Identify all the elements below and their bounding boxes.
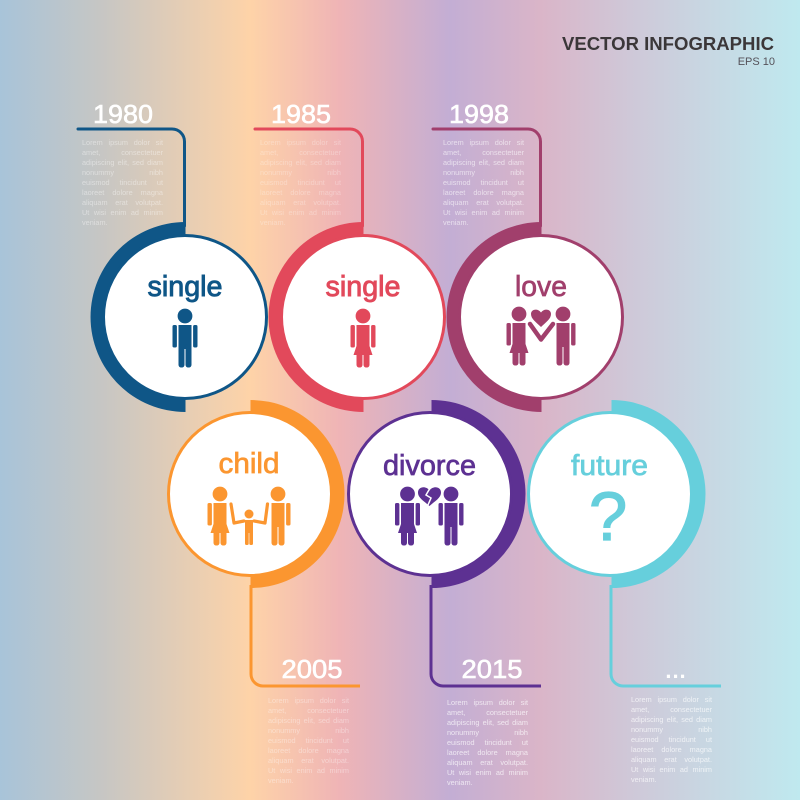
text block: 1998: aliquam erat volutpat. <box>443 198 524 207</box>
text block: 2005: Ut wisi enim ad minim <box>268 766 349 775</box>
text block: future: adipiscing elit, sed diam <box>631 715 712 724</box>
text block: 2005: veniam. <box>268 776 294 784</box>
text block: 1985: euismod tincidunt ut <box>260 178 341 187</box>
text block: 1998: Ut wisi enim ad minim <box>443 208 524 217</box>
text block: 2015: adipiscing elit, sed diam <box>447 718 528 727</box>
node: 1980 single: 1980 <box>93 99 153 129</box>
text block: 1980: laoreet dolore magna <box>82 188 163 197</box>
text block: 2005: euismod tincidunt ut <box>268 736 349 745</box>
node: 2015 divorce <box>348 400 541 686</box>
node: 2005 child: child <box>218 448 280 480</box>
text block: 2015: nonummy nibh <box>447 728 528 737</box>
text block: 1985: nonummy nibh <box>260 168 341 177</box>
text block: 1998: nonummy nibh <box>443 168 524 177</box>
icon: family with child <box>208 487 290 546</box>
text block: 2005: adipiscing elit, sed diam <box>268 716 349 725</box>
text block: future: laoreet dolore magna <box>631 745 712 754</box>
node: 2005 child <box>168 400 360 686</box>
text block: 2005: amet, consectetuer <box>268 706 349 715</box>
text block: 2005: nonummy nibh <box>268 726 349 735</box>
node: future <box>528 400 721 686</box>
text block: future <box>631 695 712 784</box>
text block: future: Lorem ipsum dolor sit <box>631 695 712 704</box>
text block: 1985: amet, consectetuer <box>260 148 341 157</box>
node: 2005 child: 2005 <box>282 654 342 684</box>
node: 1998 love: love <box>515 271 567 303</box>
text block: 1980: euismod tincidunt ut <box>82 178 163 187</box>
text block: 2015: Ut wisi enim ad minim <box>447 768 528 777</box>
node: 1985 single: 1985 <box>271 99 331 129</box>
text block: 1998: euismod tincidunt ut <box>443 178 524 187</box>
text block: 1980: Ut wisi enim ad minim <box>82 208 163 217</box>
text block: 1985: adipiscing elit, sed diam <box>260 158 341 167</box>
text block: 1985: aliquam erat volutpat. <box>260 198 341 207</box>
text block: 2015: veniam. <box>447 778 473 786</box>
text block: 1980: adipiscing elit, sed diam <box>82 158 163 167</box>
node: 2015 divorce: 2015 <box>462 654 522 684</box>
text block: 2015: Lorem ipsum dolor sit <box>447 698 528 707</box>
node: 1985 single: single <box>326 271 400 303</box>
text block: 2015: euismod tincidunt ut <box>447 738 528 747</box>
text block: 2015: laoreet dolore magna <box>447 748 528 757</box>
node: future: ... <box>665 658 687 683</box>
text block: 2015: amet, consectetuer <box>447 708 528 717</box>
icon: question mark: ? <box>589 478 627 555</box>
text block: 2015: aliquam erat volutpat. <box>447 758 528 767</box>
text block: 1985: Lorem ipsum dolor sit <box>260 138 341 147</box>
text block: 2005 <box>268 696 349 784</box>
text block: future: euismod tincidunt ut <box>631 735 712 744</box>
text block: future: nonummy nibh <box>631 725 712 734</box>
text block: 1985: Ut wisi enim ad minim <box>260 208 341 217</box>
text block: 1980: amet, consectetuer <box>82 148 163 157</box>
text block: 2005: laoreet dolore magna <box>268 746 349 755</box>
text block: future: aliquam erat volutpat. <box>631 755 712 764</box>
text block: 1980: aliquam erat volutpat. <box>82 198 163 207</box>
node: 1998 love: 1998 <box>449 99 509 129</box>
text block: 2005: Lorem ipsum dolor sit <box>268 696 349 705</box>
node: 1980 single <box>78 99 266 412</box>
node: 1980 single: single <box>148 271 222 303</box>
node: 2015 divorce: divorce <box>383 450 476 482</box>
node: 1998 love <box>433 99 622 412</box>
text block: future: amet, consectetuer <box>631 705 712 714</box>
text block: 1985: laoreet dolore magna <box>260 188 341 197</box>
text block: 1985 <box>260 138 341 226</box>
node: 1985 single <box>255 99 444 412</box>
text block: 1998: amet, consectetuer <box>443 148 524 157</box>
icon: divorced couple with broken heart <box>395 487 464 546</box>
text block: 2015 <box>447 698 528 786</box>
node: future: future <box>571 450 648 482</box>
title <box>562 34 775 68</box>
text block: 1985: veniam. <box>260 218 286 226</box>
title: VECTOR INFOGRAPHIC <box>562 34 774 54</box>
text block: 1980 <box>82 138 163 226</box>
text block: 1998: adipiscing elit, sed diam <box>443 158 524 167</box>
text block: 1998: veniam. <box>443 218 469 226</box>
text block: 1980: nonummy nibh <box>82 168 163 177</box>
title: EPS 10 <box>738 56 775 68</box>
text block: 1980: veniam. <box>82 218 108 226</box>
text block: 1998 <box>443 138 524 226</box>
text block: future: Ut wisi enim ad minim <box>631 765 712 774</box>
text block: 2005: aliquam erat volutpat. <box>268 756 349 765</box>
text block: 1998: Lorem ipsum dolor sit <box>443 138 524 147</box>
text block: future: veniam. <box>631 774 657 784</box>
icon: couple in love <box>506 307 576 366</box>
text block: 1998: laoreet dolore magna <box>443 188 524 197</box>
text block: 1980: Lorem ipsum dolor sit <box>82 138 163 147</box>
